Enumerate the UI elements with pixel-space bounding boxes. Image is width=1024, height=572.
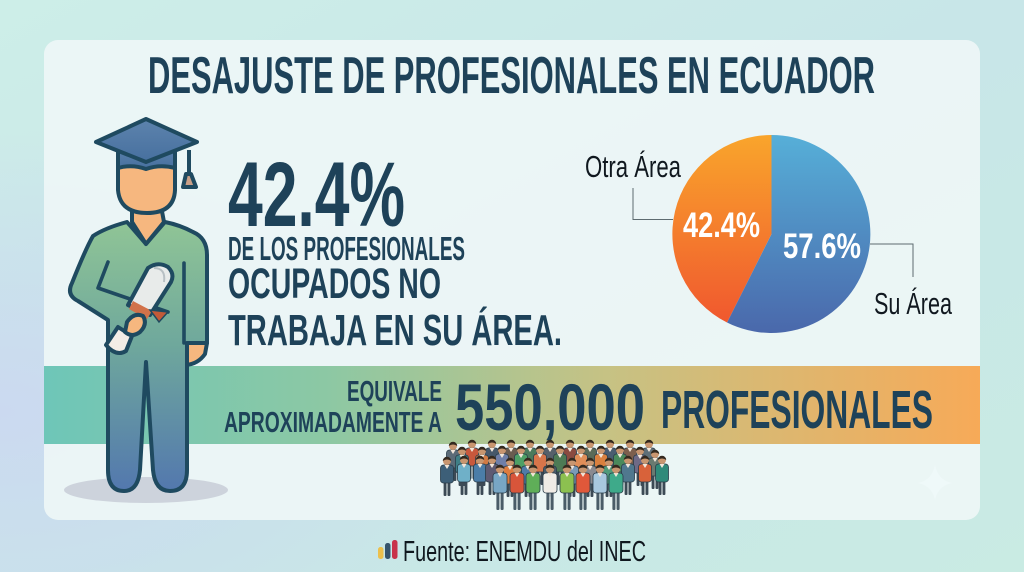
label: otra area: Otra Área	[585, 149, 682, 184]
diploma scroll	[106, 264, 172, 353]
leader lines	[633, 188, 913, 277]
source line	[378, 536, 646, 568]
banner text: APROXIMADAMENTE A	[224, 407, 442, 439]
slice: otra area	[672, 135, 772, 322]
statistic description: OCUPADOS NO	[228, 260, 441, 308]
decorative sparkle	[918, 465, 952, 500]
head	[118, 166, 175, 213]
value: 42.4%: 42.4%	[683, 206, 760, 245]
banner text: 550,000	[455, 370, 645, 444]
banner band	[44, 366, 980, 444]
mortarboard cap	[96, 119, 197, 187]
banner text	[224, 370, 933, 444]
icon: crowd of people	[440, 440, 668, 510]
pie chart	[585, 135, 953, 333]
banner text: EQUIVALE	[347, 376, 442, 408]
label: su area: Su Área	[874, 286, 953, 321]
panel: main card	[44, 40, 980, 520]
icon: graduate figure	[64, 119, 228, 503]
arm lines	[98, 262, 184, 343]
statistic: 42.4%: 42.4%	[228, 144, 405, 246]
neck	[132, 206, 164, 244]
statistic description	[228, 230, 562, 355]
statistic description: TRABAJA EN SU ÁREA.	[228, 305, 562, 355]
right hand	[186, 343, 207, 365]
slice: su area	[727, 135, 870, 333]
body and legs	[70, 222, 207, 491]
source text: Fuente: ENEMDU del INEC	[403, 536, 646, 568]
statistic description: DE LOS PROFESIONALES	[228, 230, 465, 267]
figure shadow	[64, 477, 228, 503]
value: 57.6%: 57.6%	[783, 227, 861, 266]
icon: flag-coloured bars	[378, 540, 398, 559]
